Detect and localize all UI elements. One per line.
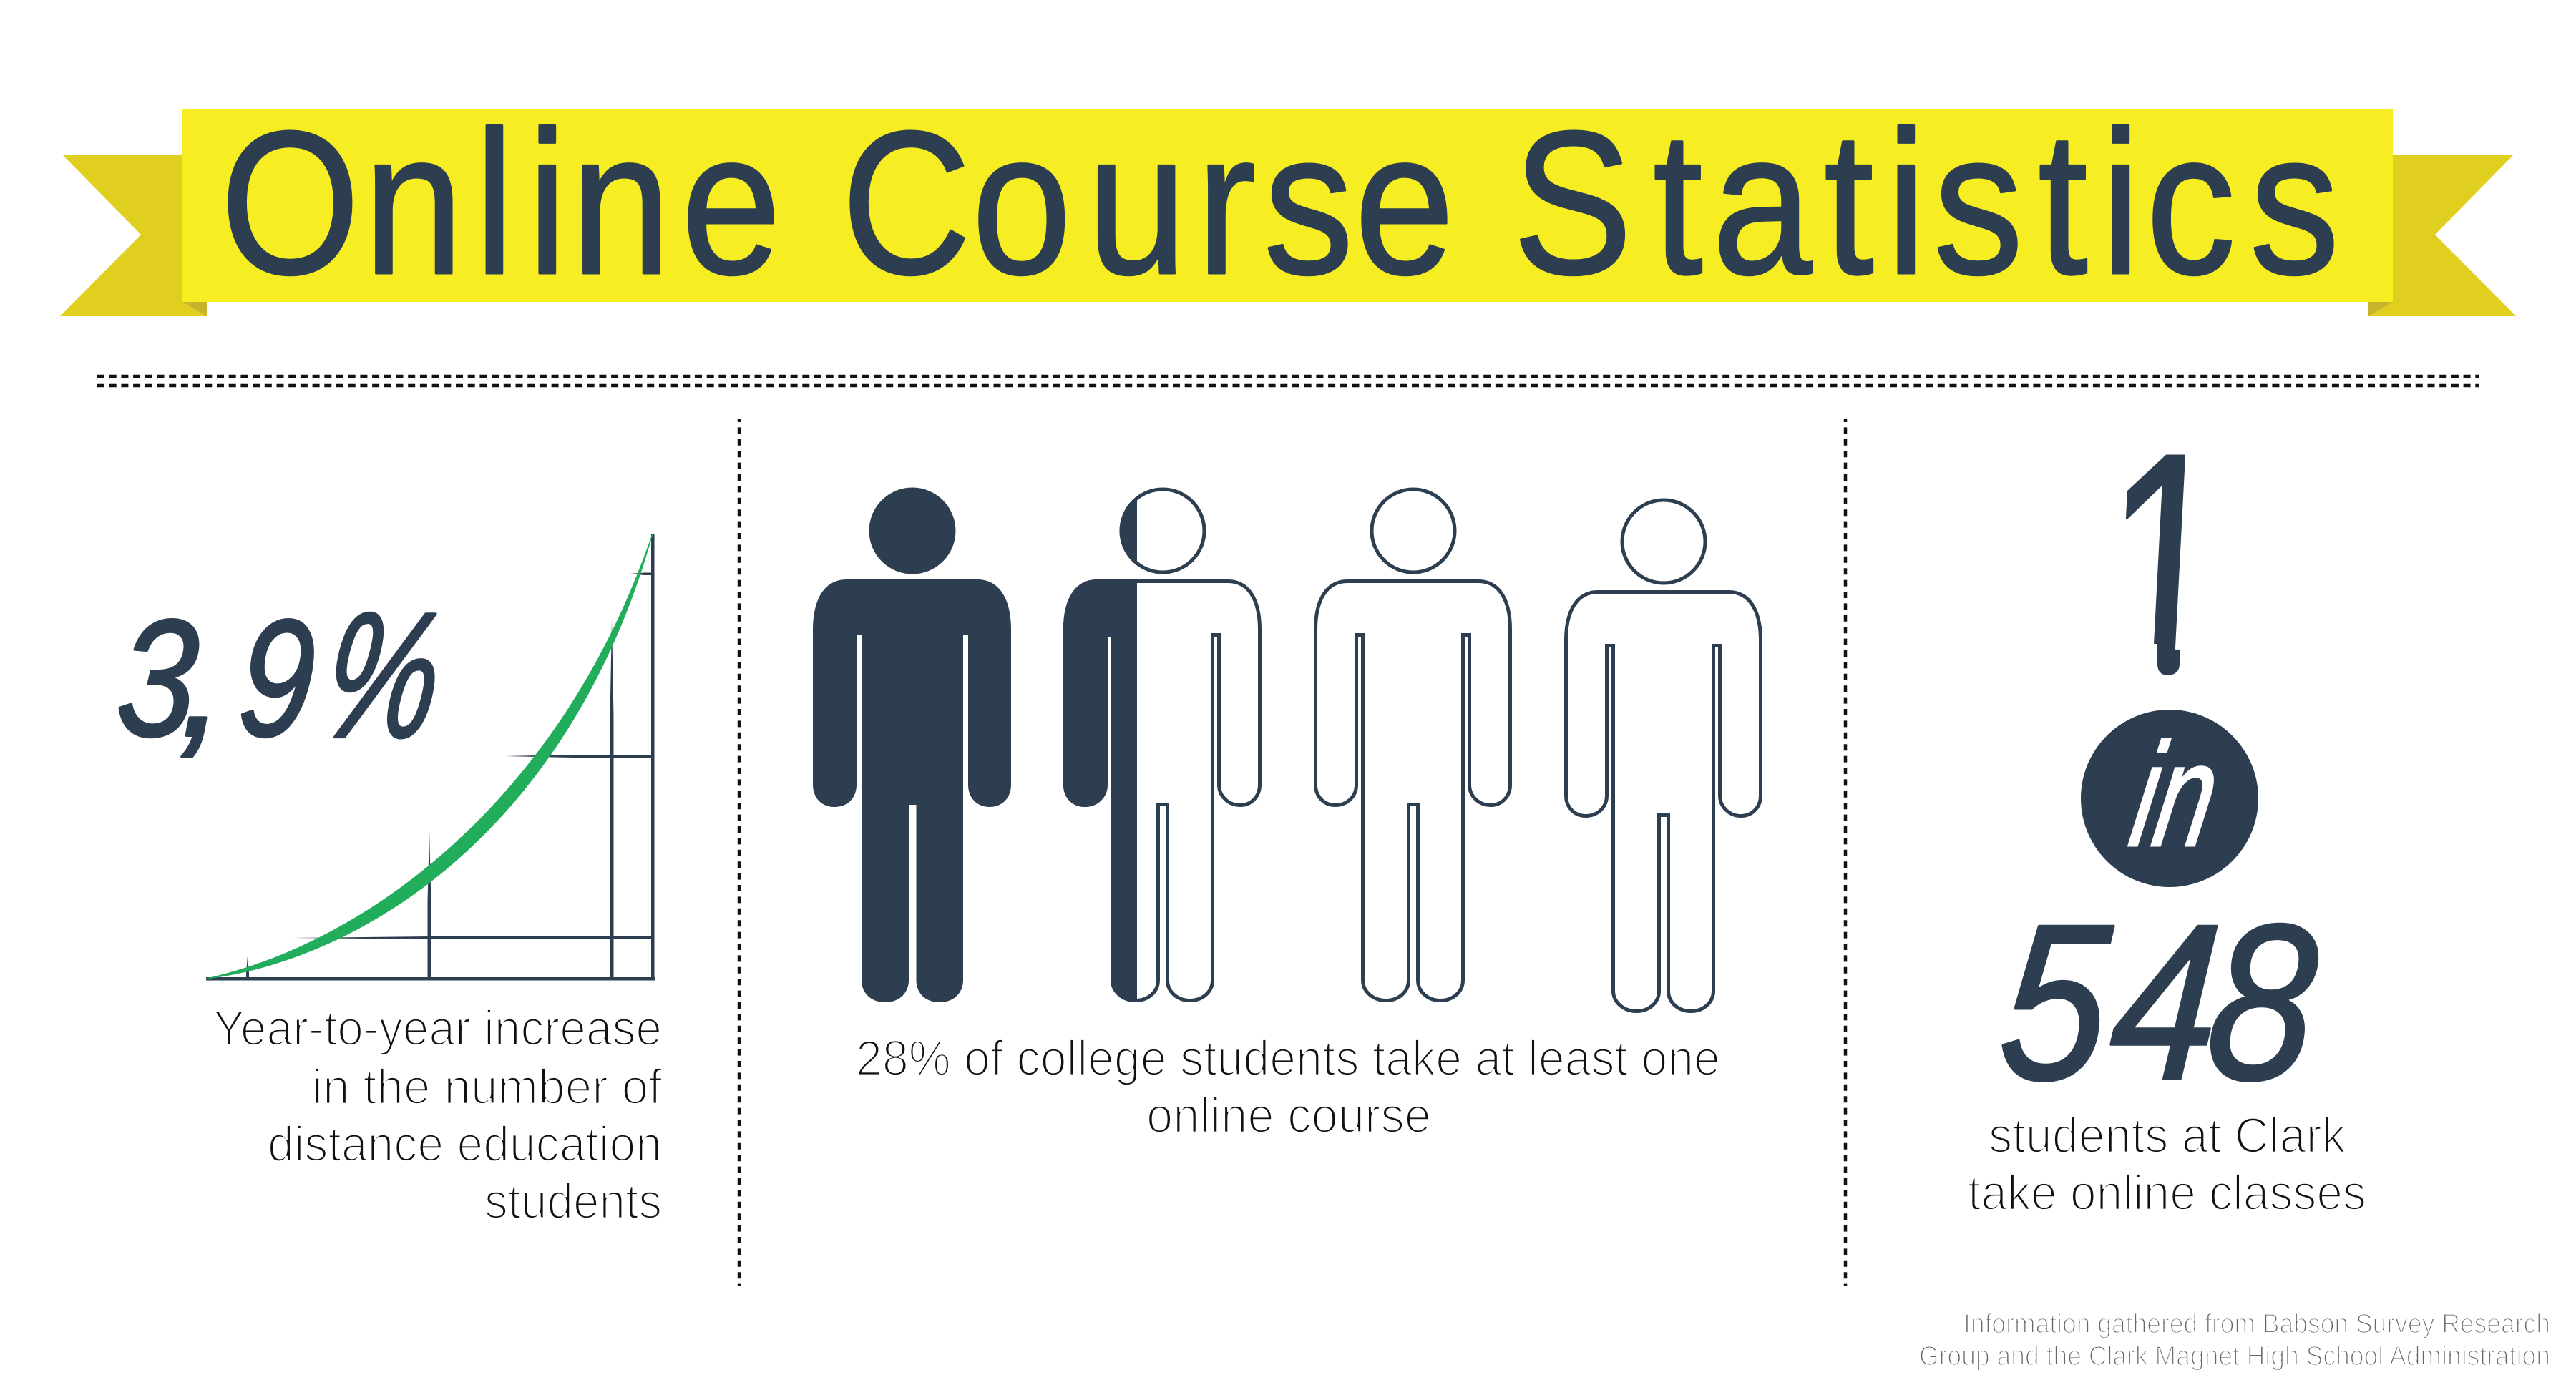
big number: 548: 5: [1993, 879, 2118, 1126]
ribbon tail: right: [2368, 155, 2516, 316]
caption: in the number of: [312, 1059, 663, 1115]
icon: filled person: [813, 488, 1011, 1002]
big number: 3,9%: ,: [179, 586, 225, 771]
icon: empty person, offset: [1566, 500, 1760, 1012]
big number: 548: [1993, 879, 2326, 1126]
caption: take online classes: [1968, 1165, 2366, 1220]
vertical dotted line: left: [738, 419, 741, 1286]
panel: ratio: [1969, 455, 2364, 1209]
icon: part-filled person: [1063, 488, 1262, 1002]
caption: students: [484, 1173, 662, 1229]
caption: 28% of college students take at least one: [856, 1030, 1720, 1086]
big number: 548: 4: [2104, 879, 2228, 1126]
source note: Information gathered from Babson Survey Research: [1963, 1309, 2550, 1339]
ribbon fold: left: [182, 302, 207, 316]
big number: 3,9%: [112, 577, 454, 775]
source note: [1919, 1309, 2550, 1371]
green curve: [206, 534, 653, 979]
dotted divider: [97, 376, 2479, 386]
big number: 3,9%: 9: [234, 585, 321, 771]
vertical dotted line: right: [1844, 419, 1847, 1286]
panel: pictogram: [813, 488, 1760, 1143]
badge: in: [2081, 710, 2258, 887]
big number: 1: 1: [2094, 388, 2236, 743]
caption: online course: [1146, 1087, 1431, 1143]
badge: in: in: [2121, 713, 2230, 877]
caption: [1968, 1107, 2366, 1220]
title: Online Course Statistics: [220, 89, 2339, 317]
caption: [213, 1000, 663, 1229]
caption: [856, 1030, 1720, 1143]
caption: Year-to-year increase: [213, 1000, 662, 1056]
big number: 3,9%: %: [313, 577, 454, 775]
big number: 548: 8: [2200, 879, 2326, 1126]
title banner: [60, 89, 2516, 317]
chart: growth curve: [206, 534, 655, 980]
source note: Group and the Clark Magnet High School Administration: [1919, 1341, 2550, 1371]
panel: growth statistic: [112, 534, 663, 1229]
icon: empty person: [1315, 489, 1510, 1000]
ribbon tail: left: [60, 155, 207, 316]
big number: 3,9%: 3: [112, 585, 203, 770]
banner band: [182, 109, 2393, 302]
caption: students at Clark: [1989, 1107, 2346, 1163]
caption: distance education: [268, 1116, 662, 1172]
ribbon fold: right: [2368, 302, 2393, 316]
